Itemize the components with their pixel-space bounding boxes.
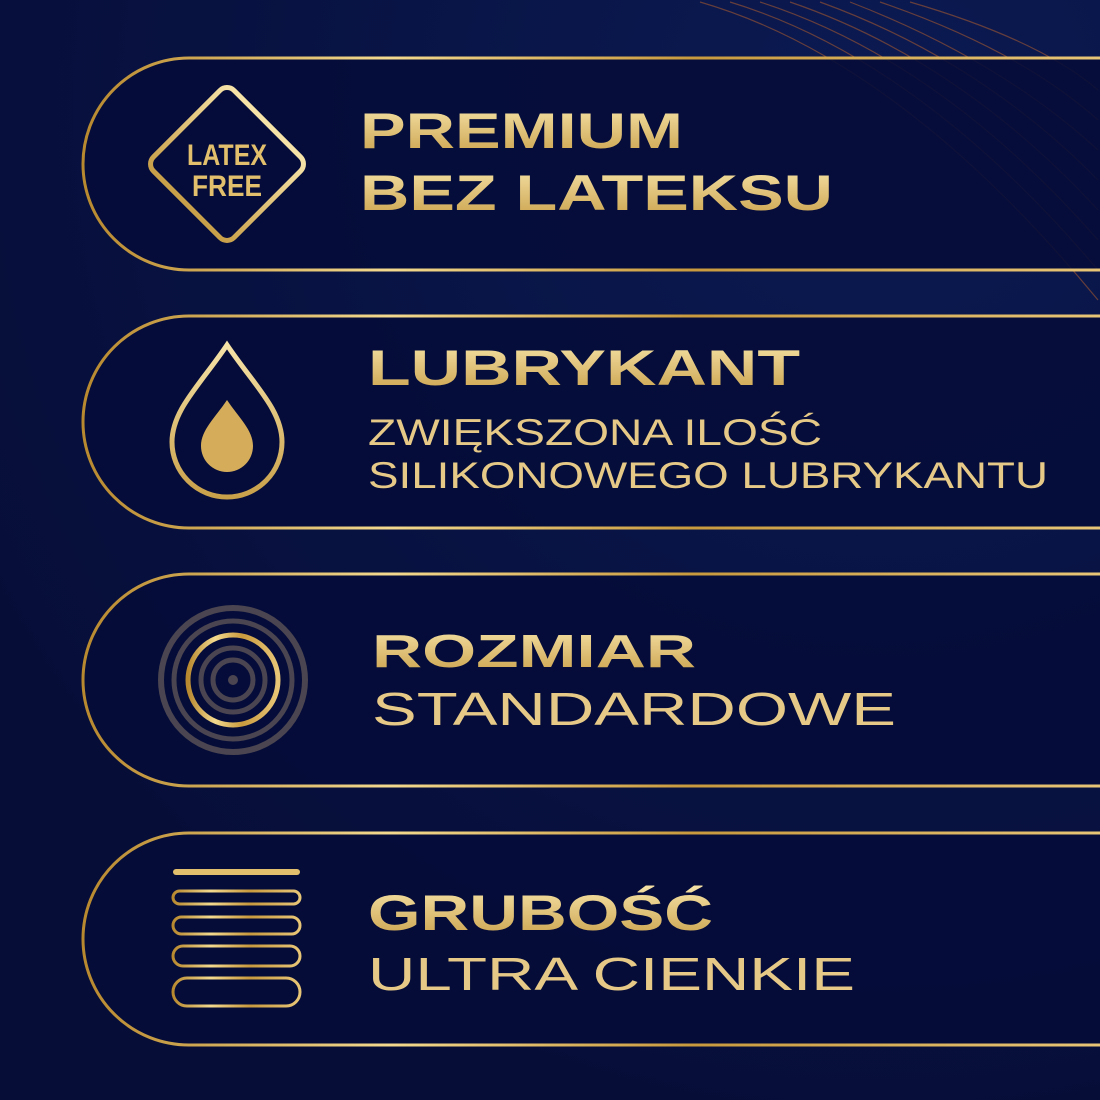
subheading: bez lateksu: BEZ LATEKSU <box>360 165 833 221</box>
heading: premium: PREMIUM <box>360 103 683 159</box>
icon: drop <box>172 345 282 497</box>
panel: premium bez lateksu <box>83 58 1100 270</box>
heading: lubrykant: LUBRYKANT <box>368 340 800 396</box>
heading: rozmiar: ROZMIAR <box>372 625 696 677</box>
icon: latex free diamond: LATEX <box>187 139 267 172</box>
icon: concentric circles <box>161 608 305 752</box>
text: description <box>368 411 1048 496</box>
heading: grubosc: GRUBOŚĆ <box>368 885 713 941</box>
text: description: SILIKONOWEGO LUBRYKANTU <box>368 455 1048 496</box>
text: ultra cienkie: ULTRA CIENKIE <box>368 948 855 1000</box>
panel: rozmiar <box>83 574 1100 786</box>
icon: thickness lines <box>173 869 300 1006</box>
panel: lubrykant <box>83 316 1100 528</box>
icon: latex free diamond <box>146 83 308 245</box>
panel: grubosc <box>83 833 1100 1045</box>
text: description: ZWIĘKSZONA ILOŚĆ <box>368 411 822 453</box>
icon: latex free diamond: FREE <box>192 170 262 203</box>
text: standardowe: STANDARDOWE <box>372 683 896 735</box>
